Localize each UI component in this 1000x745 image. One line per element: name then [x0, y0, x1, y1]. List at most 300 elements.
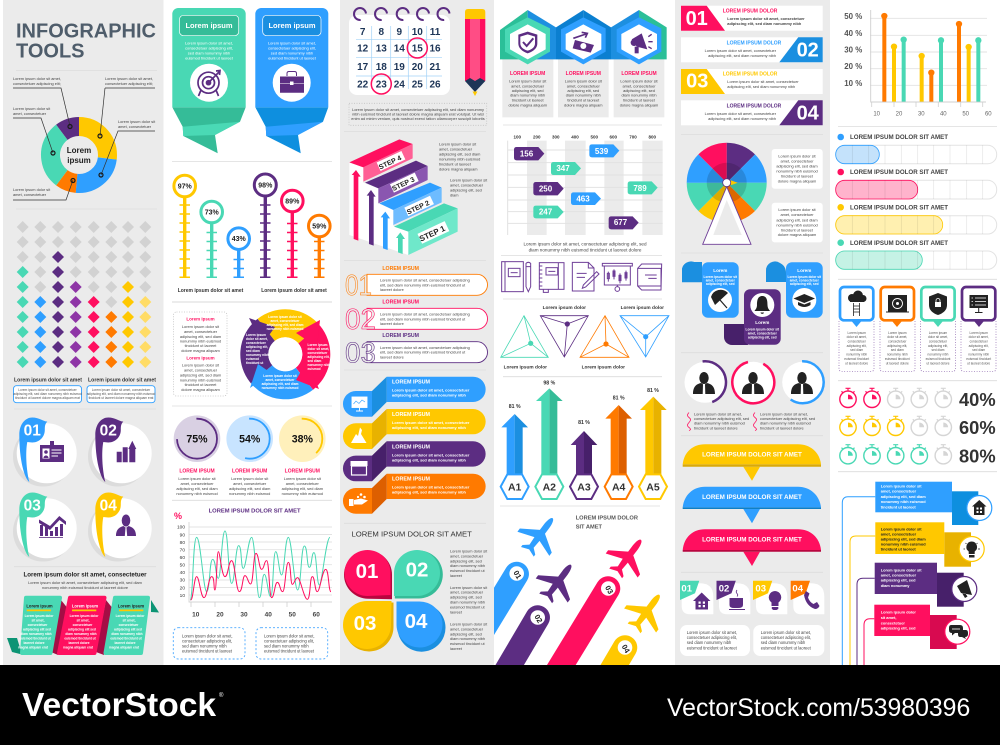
dotted text box: Lorem ipsum [186, 356, 215, 360]
hexagon cards: diam nonummy nibh [510, 93, 545, 98]
stem bar chart: 30 [918, 112, 925, 118]
circular arrow cycle chart: dolor sit amet, [308, 347, 329, 351]
circular arrow cycle chart [242, 311, 330, 398]
calendar: 12 [357, 44, 369, 55]
arrow A1 [501, 414, 529, 499]
dotted text box: Lorem ipsum dolor sit [182, 324, 220, 329]
banner 04: 04 [797, 102, 820, 124]
circular arrow cycle chart: amet, consectetuer [270, 319, 300, 323]
hexagon cards: LOREM IPSUM [566, 71, 601, 77]
radial percentages: nonummy nibh euismod [229, 491, 270, 496]
band blue: Lorem ipsum dolor sit amet, consectetuer [392, 388, 470, 393]
donut chart: amet, consectetuer [118, 124, 152, 129]
item 01: elit, sed diam nonummy nibh euismod tincidunt ut [380, 282, 466, 287]
line chart: 60 [313, 612, 320, 619]
icon: plane yellow [618, 583, 675, 641]
circular arrow cycle chart: amet, consectetuer [265, 378, 295, 382]
flow step yellow: nonummy nibh euismod [881, 542, 926, 546]
folded ribbon panels: euismod tincidunt ut [19, 636, 52, 640]
section text: Lorem ipsum dolor sit amet, consectetuer adipiscing elit, sed diam [28, 580, 142, 585]
dashed notes: euismod tincidunt ut laoreet [182, 648, 233, 654]
title [16, 20, 156, 62]
row 80%: 80% [959, 445, 996, 466]
38% gauge [279, 415, 326, 462]
flow step blue: adipiscing elit, sed diam [881, 494, 926, 499]
item 04 [88, 492, 152, 562]
radial percentages: adipiscing elit, sed diam [176, 486, 218, 491]
gantt table: 539 [595, 147, 609, 156]
stem bar chart: 10 % [844, 79, 862, 88]
donut chart: Lorem ipsum dolor sit [13, 106, 51, 111]
flow step blue: Lorem ipsum dolor sit [881, 484, 922, 489]
stem bar chart: 50 % [844, 12, 862, 21]
triangle charts: Lorem ipsum dolor [582, 364, 625, 370]
wheel notes: dolore magna aliquam [778, 232, 816, 237]
planes chart [494, 516, 660, 665]
folded ribbon panels: Lorem ipsum [26, 604, 53, 608]
card bell: amet, consectetuer [748, 332, 778, 336]
folded ribbon panels: consectetuer [119, 623, 139, 627]
petal 02: 02 [406, 559, 428, 582]
item 02 [345, 300, 488, 336]
flow steps [842, 482, 992, 665]
gantt table: 200 [533, 134, 541, 140]
hexagon cards: adipiscing elit, sed [512, 88, 544, 93]
hexagon cards: dolore magna aliquam [508, 103, 547, 108]
orange triangle [580, 316, 629, 357]
icon tiles: Lorem ipsum [969, 331, 988, 335]
flow step pink: adipiscing elit, sed [881, 626, 916, 631]
icon tiles: Lorem ipsum [847, 331, 866, 335]
item 02: 02 [100, 423, 117, 440]
card house: 01 [681, 584, 693, 595]
grid captions: Lorem ipsum dolor sit amet [14, 378, 82, 384]
hexagon cards: tincidunt ut laoreet [512, 98, 545, 103]
icon tiles: consectetuer [888, 340, 907, 344]
calendar: 19 [394, 62, 405, 73]
dashed notes: euismod tincidunt ut laoreet [264, 648, 315, 654]
stem bar chart: 20 % [844, 62, 862, 71]
folded ribbon panels: consectetuer [73, 623, 93, 627]
petal text: Lorem ipsum dolor sit [450, 585, 488, 590]
flow step yellow: Lorem ipsum dolor sit [881, 527, 922, 532]
folded ribbon panels: laoreet dolore [23, 641, 45, 645]
donut chart: Lorem ipsum dolor sit [118, 119, 156, 124]
band yellow [343, 409, 486, 449]
flow step blue: amet, consectetuer [881, 489, 917, 494]
dashed notes: sed diam nonummy nibh [182, 644, 227, 648]
circular arrow cycle chart: sed diam [308, 359, 321, 363]
gantt table: 347 [556, 164, 570, 173]
folded ribbon panels: magna aliquam erat [63, 646, 94, 650]
wheel notes: dolore magna aliquam [778, 178, 816, 183]
line chart: % [174, 511, 182, 521]
calendar: 21 [429, 62, 441, 73]
numbered banners [681, 6, 823, 125]
lollipop percentage chart: Lorem ipsum dolor sit amet [261, 288, 327, 294]
banner 03: 03 [686, 70, 708, 92]
item 02: LOREM IPSUM [382, 300, 419, 306]
banner 02: 02 [797, 40, 819, 62]
banner 04: Lorem ipsum dolor sit amet, consectetuer [705, 111, 777, 116]
bottom notes: sed diam nonummy nibh [687, 640, 732, 645]
banner pink: LOREM IPSUM DOLOR SIT AMET [702, 537, 802, 544]
bottom notes: euismod tincidunt ut laoreet [761, 645, 812, 650]
icon: plane pink [600, 528, 657, 586]
petal 03: 03 [354, 612, 376, 635]
calendar: 26 [429, 79, 441, 90]
radial percentages: nonummy nibh euismod [282, 491, 323, 496]
98% [254, 174, 276, 278]
circular arrow cycle chart: Lorem ipsum [246, 333, 266, 337]
stem bar chart: 30 % [844, 46, 862, 54]
band yellow: Lorem ipsum dolor sit amet, consectetuer [392, 420, 470, 425]
petal text: euismod tincidunt ut [450, 641, 486, 646]
icon: briefcase [280, 72, 304, 93]
bottom notes: consectetuer adipiscing elit, [761, 635, 811, 640]
line chart: 50 [180, 563, 185, 569]
icon tiles: euismod tincidunt [926, 357, 951, 361]
progress yellow: LOREM IPSUM DOLOR SIT AMET [850, 204, 948, 212]
item 01: laoreet dolore [380, 287, 404, 292]
dotted note: enim ad minim veniam, quis nostrud exerci tation ullamcorper suscipit lobortis [351, 116, 485, 121]
donut chart [13, 76, 156, 200]
folded cards [682, 261, 823, 345]
footer bar [0, 665, 1000, 745]
row 80% [840, 445, 996, 466]
band purple: Lorem ipsum dolor sit amet, consectetuer [392, 452, 470, 457]
card bell [724, 289, 781, 345]
gantt table: 600 [610, 134, 618, 140]
petal text: laoreet [450, 646, 463, 651]
folded ribbon panels [7, 598, 159, 655]
flow step purple: diam nonummy [881, 583, 910, 588]
person rings: tincidunt ut laoreet dolore [760, 425, 804, 430]
isometric steps: STEP 2 [406, 200, 431, 216]
radial percentages: nonummy nibh euismod [176, 491, 218, 496]
card umbrella: Lorem ipsum dolor sit [704, 275, 738, 279]
icon tiles: sed diam [932, 348, 945, 352]
hexagon arrows chart: 81 % [509, 404, 521, 410]
card cup [716, 581, 750, 614]
card graduation: Lorem [797, 268, 811, 273]
icon tiles: euismod tincidunt [844, 357, 869, 361]
folded ribbon panels: diam nonummy nibh [65, 632, 97, 636]
38% gauge: 38% [292, 434, 313, 446]
flow step pink: sit amet, [881, 615, 896, 620]
wheel notes: amet, consectetuer [780, 158, 814, 163]
radial percentages: Lorem ipsum dolor sit [178, 476, 217, 481]
isometric steps: STEP 4 [378, 155, 403, 171]
folded ribbon panels: sit amet, [77, 618, 90, 622]
gantt table: 250 [539, 184, 553, 194]
circular arrow cycle chart: Lorem ipsum dolor sit [263, 374, 298, 378]
card umbrella [682, 261, 739, 318]
donut chart: amet, consectetuer [13, 111, 47, 116]
circular arrow cycle chart: consectetuer [308, 351, 328, 355]
isometric steps: amet, consectetuer [450, 182, 484, 188]
radial percentages [174, 415, 326, 496]
flow step pink: consectetuer [881, 620, 905, 625]
circular arrow cycle chart: nonummy nibh euismod [262, 386, 298, 390]
wheel notes: Lorem ipsum dolor sit [778, 207, 817, 212]
hexagon cards: adipiscing elit, sed [623, 88, 655, 93]
calendar: 24 [394, 79, 405, 90]
banner 01: adipiscing elit, sed diam nonummy nibh [727, 21, 802, 26]
hexagon arrows chart: 81 % [613, 396, 625, 402]
progress teal [836, 239, 997, 269]
folded ribbon panels: diam nonummy nibh [111, 632, 143, 636]
item 02: Lorem ipsum dolor sit amet, consectetuer adipiscing [380, 312, 470, 316]
tile screen [962, 287, 995, 327]
circular arrow cycle chart: Lorem ipsum dolor sit [268, 315, 303, 319]
icon tiles: sed diam [972, 348, 986, 352]
folded ribbon panels: sit amet, [123, 618, 136, 622]
tile cloud [840, 287, 873, 327]
item 01 [345, 266, 488, 302]
petal text: diam nonummy nibh [450, 563, 485, 568]
icon: plane purple [530, 553, 587, 611]
radial percentages: Lorem ipsum dolor sit [231, 476, 269, 481]
petal text [450, 548, 488, 651]
icon: target [198, 70, 220, 96]
flow step pink [864, 605, 970, 665]
item 01: Lorem ipsum dolor sit amet, consectetuer adipiscing [380, 278, 470, 282]
isometric steps: adipiscing elit, sed [450, 188, 482, 192]
folded ribbon panels: adipiscing elit sed [114, 628, 142, 632]
gantt table: 247 [539, 208, 553, 216]
card bell: Lorem ipsum dolor sit [746, 328, 780, 332]
wheel notes: Lorem ipsum dolor sit [778, 153, 817, 158]
petal text: adipiscing elit, sed [450, 631, 482, 636]
folded ribbon panels: Lorem ipsum dolor [70, 614, 99, 618]
stem bar chart: 10 [873, 112, 881, 118]
row 60% [840, 416, 996, 438]
icon tiles: ut laoreet dolore [967, 362, 990, 366]
icon: bell [754, 296, 770, 314]
radial percentages: amet, consectetuer [233, 481, 267, 486]
banner 03 [681, 69, 823, 94]
section text [23, 572, 147, 590]
gantt table: 463 [576, 194, 590, 204]
person rings: consectetuer adipiscing elit, sed [760, 416, 815, 421]
item 02: laoreet dolore [380, 321, 404, 326]
banner 02 [681, 37, 823, 62]
petal text: adipiscing elit, sed [450, 558, 482, 563]
stem bar chart: 20 [896, 112, 903, 118]
isometric steps: tincidunt ut laoreet [439, 161, 472, 166]
wheel notes: tincidunt ut laoreet [781, 174, 814, 179]
hexagon arrows chart: A1 [508, 482, 522, 494]
diamond pictogram grid [17, 221, 151, 368]
tile lock shield [921, 287, 955, 327]
card graduation: amet, consectetuer [790, 278, 820, 282]
progress blue [836, 134, 997, 164]
petal text: euismod tincidunt ut [450, 604, 486, 609]
item 01: 01 [345, 270, 372, 302]
isometric steps: STEP 1 [418, 224, 447, 244]
folded ribbon panels: laoreet dolore [114, 641, 136, 645]
43%: 43% [232, 236, 246, 243]
card umbrella: amet, consectetuer [706, 278, 736, 282]
icon: mountain [351, 428, 366, 443]
isometric steps: adipiscing elit, sed diam [439, 152, 480, 156]
banner 04: adipiscing elit, sed diam nonummy nibh [708, 116, 776, 121]
title: INFOGRAPHIC [16, 20, 156, 42]
line chart: 50 [289, 612, 296, 619]
grid captions: Lorem ipsum dolor sit amet, consectetuer [92, 388, 151, 392]
banner 02: LOREM IPSUM DOLOR [727, 40, 782, 46]
hexagon arrows chart: A5 [646, 482, 660, 494]
icon tiles: Lorem ipsum [929, 331, 948, 335]
icon tiles: dolor sit amet, [928, 335, 948, 339]
folded ribbon panels: Lorem ipsum dolor [25, 614, 54, 618]
item 03: LOREM IPSUM [382, 333, 419, 339]
icon: pencil [465, 9, 485, 96]
dashed notes: consectetuer adipiscing elit, [182, 638, 232, 644]
icon: notebook [539, 263, 564, 292]
progress bars [836, 134, 997, 269]
dashed notes [173, 628, 328, 659]
icon: book and pencil [502, 262, 531, 292]
planes chart: 02 [532, 613, 544, 625]
item 03: laoreet dolore [380, 354, 404, 359]
lollipop percentage chart: Lorem ipsum dolor sit amet [178, 288, 244, 294]
banner 01: Lorem ipsum dolor sit amet, consectetuer [727, 16, 805, 21]
progress pink [836, 169, 997, 199]
calendar: 13 [376, 44, 387, 55]
hexagon cards: LOREM IPSUM [621, 71, 657, 77]
flow step blue: nonummy nibh euismod [881, 499, 926, 504]
wheel chart [687, 143, 767, 244]
43% [228, 228, 250, 278]
icon tiles: nonummy nibh [887, 352, 908, 356]
panel: ribbon banner teal: euismod tincidunt ut laoreet [185, 56, 234, 60]
radial percentages: amet, consectetuer [286, 481, 320, 486]
card bell: adipiscing elit, sed [748, 336, 777, 340]
icon tiles: consectetuer [848, 340, 867, 344]
grid captions: adipiscing elit, sed diam nonummy nibh euismod [87, 392, 156, 396]
grid captions [13, 378, 156, 403]
hexagon cards: diam nonummy nibh [566, 93, 601, 98]
petal 04: 04 [405, 610, 428, 633]
calendar: 17 [357, 62, 369, 73]
banner 03: adipiscing elit, sed diam nonummy nibh [727, 84, 795, 89]
band orange: adipiscing elit, sed diam nonummy nibh [392, 490, 467, 495]
stem bar chart: 50 [962, 112, 970, 118]
petal text: laoreet [450, 573, 463, 578]
pink series [191, 552, 331, 600]
hexagon arrows chart: 81 % [578, 420, 590, 426]
card umbrella: Lorem [713, 268, 727, 273]
wheel notes: nonummy nibh euismod [776, 169, 818, 174]
item 01: 01 [24, 423, 41, 440]
radial percentages: adipiscing elit, sed diam [282, 486, 323, 491]
calendar: 20 [412, 62, 423, 73]
circular arrow cycle chart: adipiscing elit, [246, 345, 268, 349]
line chart: 30 [180, 578, 185, 584]
circular arrow cycle chart: dolor sit amet, [246, 337, 268, 341]
outlined list [345, 266, 488, 370]
isometric steps: STEP 3 [391, 176, 416, 193]
petal text: euismod tincidunt ut [450, 568, 486, 573]
folded ribbon panels: Lorem ipsum dolor [116, 614, 145, 618]
hexagon cards: tincidunt ut laoreet [567, 98, 600, 103]
petal text: adipiscing elit, sed [450, 595, 482, 600]
icon tiles: dolor sit amet, [887, 335, 907, 339]
circular arrow cycle chart: adipiscing elit, sed diam [267, 323, 304, 327]
stem bar chart: 40 [940, 112, 947, 118]
banner 02: adipiscing elit, sed diam nonummy nibh [708, 53, 776, 58]
hexagon cards: amet, consectetuer [511, 83, 545, 88]
line chart: 40 [265, 612, 272, 619]
row 40%: 40% [959, 389, 996, 410]
progress blue: LOREM IPSUM DOLOR SIT AMET [850, 134, 948, 141]
folded ribbon panels: Lorem ipsum [72, 604, 98, 608]
dotted text box: tincidunt ut laoreet [185, 343, 217, 348]
line chart: 70 [180, 548, 185, 554]
line chart: 20 [216, 612, 224, 619]
hexagon cards: adipiscing elit, sed [567, 88, 599, 93]
folded ribbon panels: laoreet dolore [68, 641, 90, 645]
teal triangle [501, 316, 548, 357]
icon: umbrella [711, 290, 728, 308]
circular arrow cycle chart: nonummy nibh [246, 353, 269, 357]
item 01 [13, 418, 77, 486]
folded ribbon panels: Lorem ipsum [118, 604, 144, 608]
wheel notes: adipiscing elit, sed diam [776, 164, 818, 169]
dotted text box: adipiscing elit, sed diam [180, 334, 221, 339]
54% gauge [226, 415, 273, 462]
flow step yellow: tincidunt ut laoreet [881, 546, 916, 552]
card graduation: adipiscing elit, sed [790, 282, 819, 286]
banner 03: LOREM IPSUM DOLOR [723, 72, 778, 78]
triangle charts [501, 305, 669, 370]
flow step purple: amet, consectetuer [881, 573, 917, 578]
98%: 98% [258, 182, 273, 190]
donut chart: consectetuer adipiscing elit; [13, 81, 61, 86]
progress pink: LOREM IPSUM DOLOR SIT AMET [850, 169, 948, 176]
icon tiles: ut laoreet dolore [886, 362, 909, 366]
calendar: 15 [412, 44, 423, 55]
calendar: 22 [357, 79, 369, 90]
item 03 [345, 333, 488, 370]
isometric steps: Lorem ipsum dolor sit [439, 142, 477, 147]
panel: ribbon banner blue: sed diam nonummy nibh [271, 50, 313, 56]
calendar: 8 [379, 27, 385, 38]
banner 04 [681, 100, 823, 125]
calendar: 16 [429, 44, 441, 55]
hexagon arrows chart: A2 [543, 482, 556, 494]
calendar: 10 [412, 27, 423, 38]
gantt table: 500 [591, 134, 599, 140]
icon: document and pen [572, 262, 599, 291]
stem bar chart [844, 10, 992, 118]
section text: nonummy nibh euismod tincidunt ut laoreet dolore [42, 585, 128, 590]
folded ribbon panels: adipiscing elit sed [68, 628, 96, 632]
calendar: 9 [397, 27, 403, 38]
folded ribbon panels: sit amet, [32, 618, 45, 622]
line chart: 40 [180, 570, 185, 576]
icon cards row [680, 581, 824, 614]
dotted text box: dolore magna aliquam [181, 387, 220, 392]
item 02 [88, 418, 152, 486]
dotted note: nibh euismod tincidunt ut laoreet dolore magna aliquam erat volutpat. Ut wisi [352, 112, 484, 116]
hexagon cards: amet, consectetuer [622, 83, 656, 88]
icon tiles: consectetuer [970, 340, 989, 344]
icon: presentation board [602, 263, 632, 291]
icon tiles: nonummy nibh [846, 352, 867, 356]
